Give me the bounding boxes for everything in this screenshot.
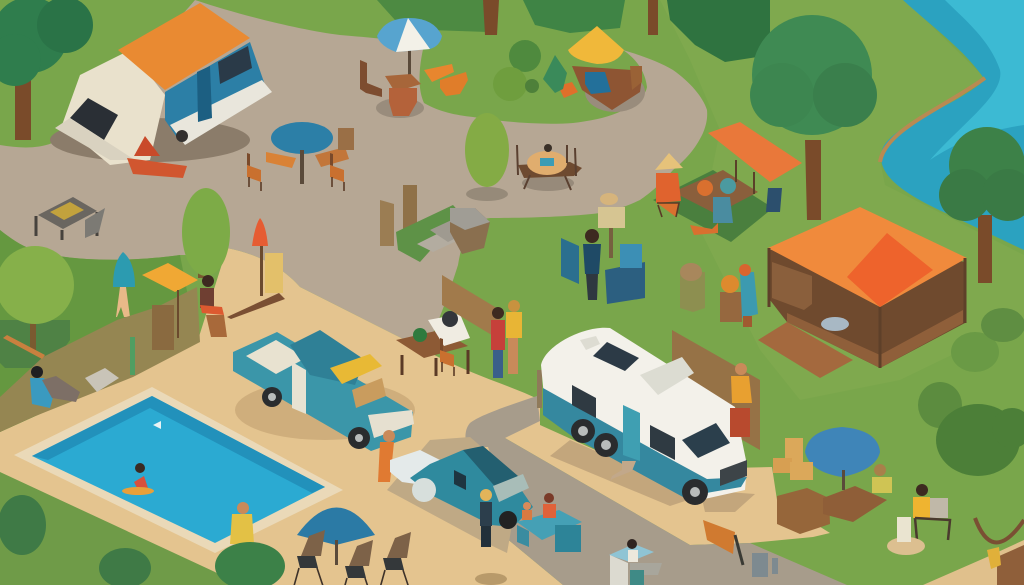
wooden fence left — [0, 287, 200, 432]
orange canopy dining — [653, 122, 802, 242]
right tree — [939, 127, 1024, 283]
left tree — [182, 188, 230, 278]
person dark standing — [480, 489, 492, 547]
bottom center person at table — [475, 539, 662, 585]
sand plaza — [0, 248, 830, 585]
lower market chairs and crates — [703, 520, 778, 577]
yellow umbrella set — [558, 26, 645, 112]
right market stall people — [823, 464, 950, 540]
small grey table — [36, 197, 105, 240]
picnic set near umbrella — [360, 60, 468, 118]
orange figure — [378, 430, 395, 482]
right market blue umbrella — [805, 427, 880, 490]
picket fence center — [442, 275, 500, 340]
red flag and bench with person — [200, 218, 285, 337]
gravel road — [0, 0, 707, 350]
left bush tree — [0, 246, 74, 368]
river — [880, 0, 1024, 250]
yellow awning — [142, 263, 198, 338]
large right tree — [750, 15, 877, 220]
shrubs center top — [493, 40, 567, 101]
cafe table center — [517, 144, 582, 191]
blue striped umbrella — [377, 18, 442, 76]
white motorhome — [541, 328, 755, 512]
teal car — [390, 446, 533, 529]
blue kiosk and person — [561, 229, 645, 304]
person in orange by fence — [730, 363, 752, 437]
sand corner bottom right — [923, 540, 1024, 585]
teal picnic table — [517, 493, 582, 552]
top left tree — [0, 0, 93, 140]
lawn shading top right — [660, 0, 1024, 400]
stone stairs and fence — [380, 185, 490, 262]
large orange canopy pavilion — [758, 207, 967, 378]
swimming pool — [14, 387, 343, 553]
teal parasol — [113, 252, 135, 317]
camper with orange roof — [50, 3, 272, 178]
person walking by motorhome — [610, 461, 636, 482]
teal pickup truck — [233, 330, 415, 451]
right bushes — [918, 308, 1024, 476]
car shadow on sand — [387, 437, 520, 553]
decorative lamp — [598, 193, 625, 258]
picket fence right — [537, 330, 760, 450]
left lawn — [0, 230, 197, 432]
top center trees — [377, 0, 770, 62]
round blue table set — [247, 122, 354, 191]
paved driveway — [465, 396, 847, 585]
cardboard boxes — [773, 438, 830, 534]
pool side person — [230, 502, 254, 544]
stump — [680, 263, 705, 312]
small sign on sand disc — [887, 517, 925, 555]
wooden swing bottom right — [975, 518, 1024, 585]
tall shrub — [465, 113, 509, 201]
person with barrel — [720, 264, 758, 327]
center picnic group — [396, 311, 470, 376]
bottom left lawn — [0, 472, 235, 585]
two standing people — [491, 300, 522, 378]
bottom left shrubs — [0, 495, 285, 585]
blue parasol with chairs — [294, 508, 411, 585]
poolside lounger and person — [30, 366, 119, 408]
